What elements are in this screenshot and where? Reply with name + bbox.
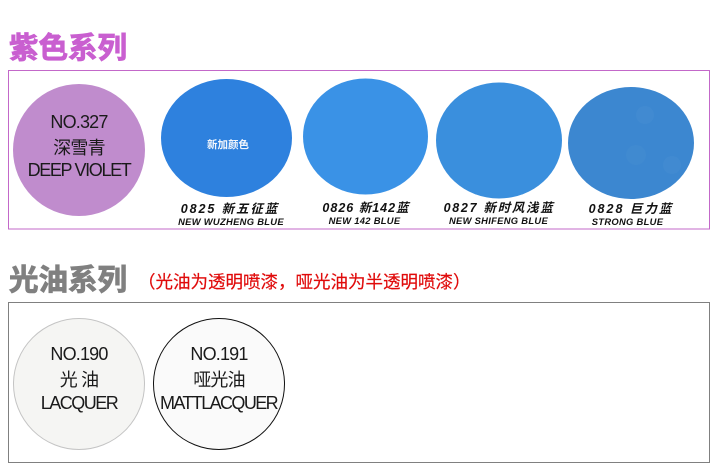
swatch: 0827 new shifeng blue: NEW SHIFENG BLUE — [449, 215, 548, 226]
swatch: deep violet — [13, 84, 145, 216]
swatch: 0826 new 142 blue: 0826 新142蓝 — [322, 201, 411, 215]
swatch: lacquer: NO.190 — [50, 344, 108, 364]
swatch: 0825 new wuzheng blue: 0825 新五征蓝 — [181, 202, 280, 216]
swatch: 0828 strong blue: 0828 巨力蓝 — [589, 202, 674, 216]
swatch: lacquer — [14, 318, 144, 450]
swatch: matt lacquer: 哑光油 — [193, 370, 245, 390]
swatch: deep violet: NO.327 — [50, 112, 108, 132]
heading: purple series: 紫色系列 — [9, 32, 127, 65]
note: lacquer explanation: （光油为透明喷漆，哑光油为半透明喷漆） — [138, 272, 470, 292]
swatch: 0825 new wuzheng blue — [161, 79, 292, 227]
heading: lacquer series: 光油系列 — [9, 264, 127, 297]
swatch: deep violet: 深雪青 — [53, 138, 105, 158]
swatch: lacquer: LACQUER — [41, 393, 119, 413]
swatch: lacquer: 光 油 — [60, 370, 98, 390]
swatch: 0826 new 142 blue — [303, 78, 428, 226]
swatch: deep violet: DEEP VIOLET — [28, 160, 132, 180]
swatch: 0828 strong blue: STRONG BLUE — [592, 216, 664, 227]
swatch: 0827 new shifeng blue — [436, 82, 562, 226]
panel: purple series — [8, 70, 710, 229]
swatch: 0828 strong blue — [568, 87, 694, 227]
swatch: 0826 new 142 blue: NEW 142 BLUE — [329, 215, 401, 226]
swatch: matt lacquer: MATTLACQUER — [160, 393, 279, 413]
swatch: matt lacquer: NO.191 — [190, 344, 248, 364]
swatch: 0827 new shifeng blue: 0827 新时风浅蓝 — [444, 201, 555, 215]
swatch: 0825 new wuzheng blue: NEW WUZHENG BLUE — [178, 216, 284, 227]
swatch: matt lacquer — [154, 318, 284, 450]
swatch: 0825 new wuzheng blue: 新加颜色 — [207, 138, 249, 151]
panel: lacquer series — [8, 302, 710, 462]
